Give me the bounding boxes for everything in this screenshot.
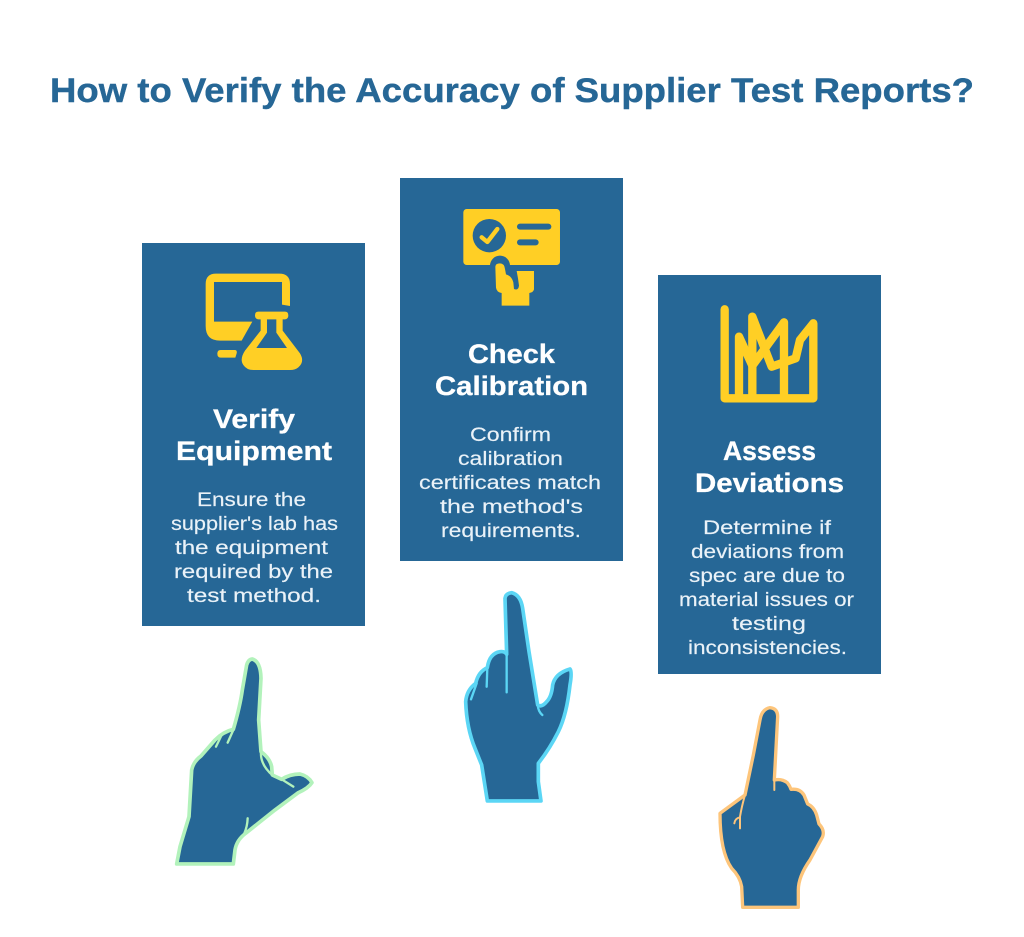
heading: verify equipment: Equipment <box>176 436 332 466</box>
heading: assess deviations: Deviations <box>695 468 844 498</box>
text: assess deviations description: Determine if <box>703 518 832 539</box>
heading: check calibration: Check <box>468 339 556 369</box>
icon: hand with cyan outline <box>466 593 571 801</box>
icon: hand with green outline <box>177 659 312 864</box>
icon: hand with orange outline <box>720 708 823 907</box>
icon: jagged line chart <box>725 309 813 398</box>
heading: verify equipment <box>176 404 332 466</box>
text: check calibration description: certificates match <box>419 473 601 494</box>
text: check calibration description: requirements. <box>441 521 581 542</box>
panel: assess deviations <box>658 275 881 674</box>
text: assess deviations description: testing <box>732 614 806 635</box>
heading: verify equipment: Verify <box>213 404 295 434</box>
text: verify equipment description: supplier's lab has <box>171 514 338 535</box>
text: assess deviations description <box>679 518 855 659</box>
text: assess deviations description: deviations from <box>691 542 844 563</box>
text: verify equipment description: the equipment <box>175 538 329 559</box>
heading: check calibration <box>435 339 588 401</box>
title: How to Verify the Accuracy of Supplier Test Reports? <box>50 72 974 110</box>
text: verify equipment description: Ensure the <box>197 490 306 511</box>
heading: assess deviations <box>695 436 844 498</box>
text: verify equipment description: test method. <box>187 586 321 607</box>
heading: assess deviations: Assess <box>723 436 816 466</box>
text: check calibration description: the method's <box>440 497 583 518</box>
text: check calibration description <box>419 425 601 542</box>
text: assess deviations description: material issues or <box>679 590 855 611</box>
icon: monitor and flask <box>206 274 302 370</box>
panel: check calibration <box>400 178 623 561</box>
text: assess deviations description: inconsistencies. <box>688 638 847 659</box>
text: check calibration description: calibration <box>458 449 563 470</box>
text: assess deviations description: spec are due to <box>689 566 845 587</box>
panel: verify equipment <box>142 243 365 626</box>
text: verify equipment description: required by the <box>174 562 333 583</box>
heading: check calibration: Calibration <box>435 371 588 401</box>
text: check calibration description: Confirm <box>470 425 551 446</box>
icon: checklist card with pointing hand <box>463 209 560 306</box>
text: verify equipment description <box>171 490 338 607</box>
